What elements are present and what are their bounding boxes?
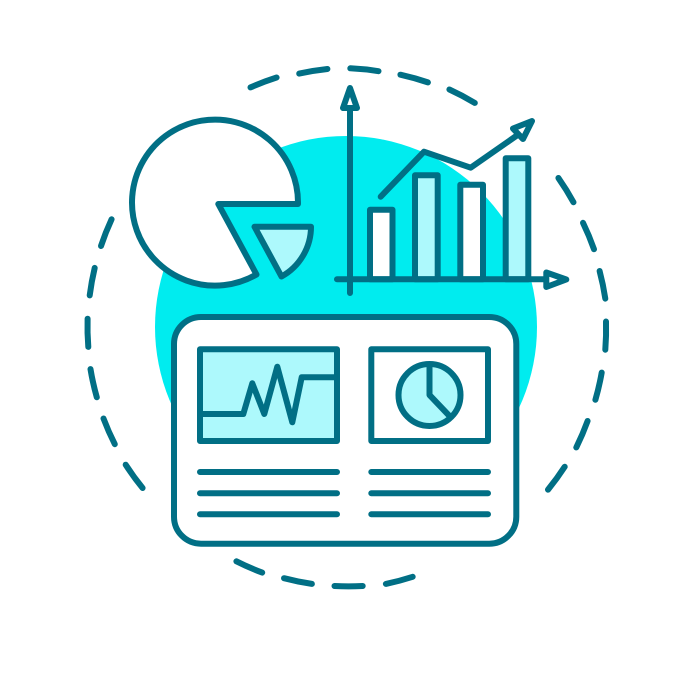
dashboard panel [174,317,516,544]
right text lines [371,472,488,514]
bar 3 [460,185,483,279]
detached pie slice [254,227,311,276]
y axis with arrowhead [343,88,357,293]
pie chart with detached slice [132,120,311,286]
bar 2 [415,175,438,279]
bar 4 [506,158,528,279]
trend arrowhead [513,121,532,139]
trend line [381,134,519,197]
pie chart body [132,120,298,286]
left screen: line graph [200,349,337,441]
background cyan circle [155,136,537,518]
bar 1 [370,210,392,279]
dashed outer ring [87,68,606,586]
bar chart with axes and trend arrow [337,88,566,293]
left text lines [200,472,337,514]
right screen: small pie chart [371,349,488,441]
panel frame [174,317,516,544]
x axis with arrowhead [337,272,566,287]
